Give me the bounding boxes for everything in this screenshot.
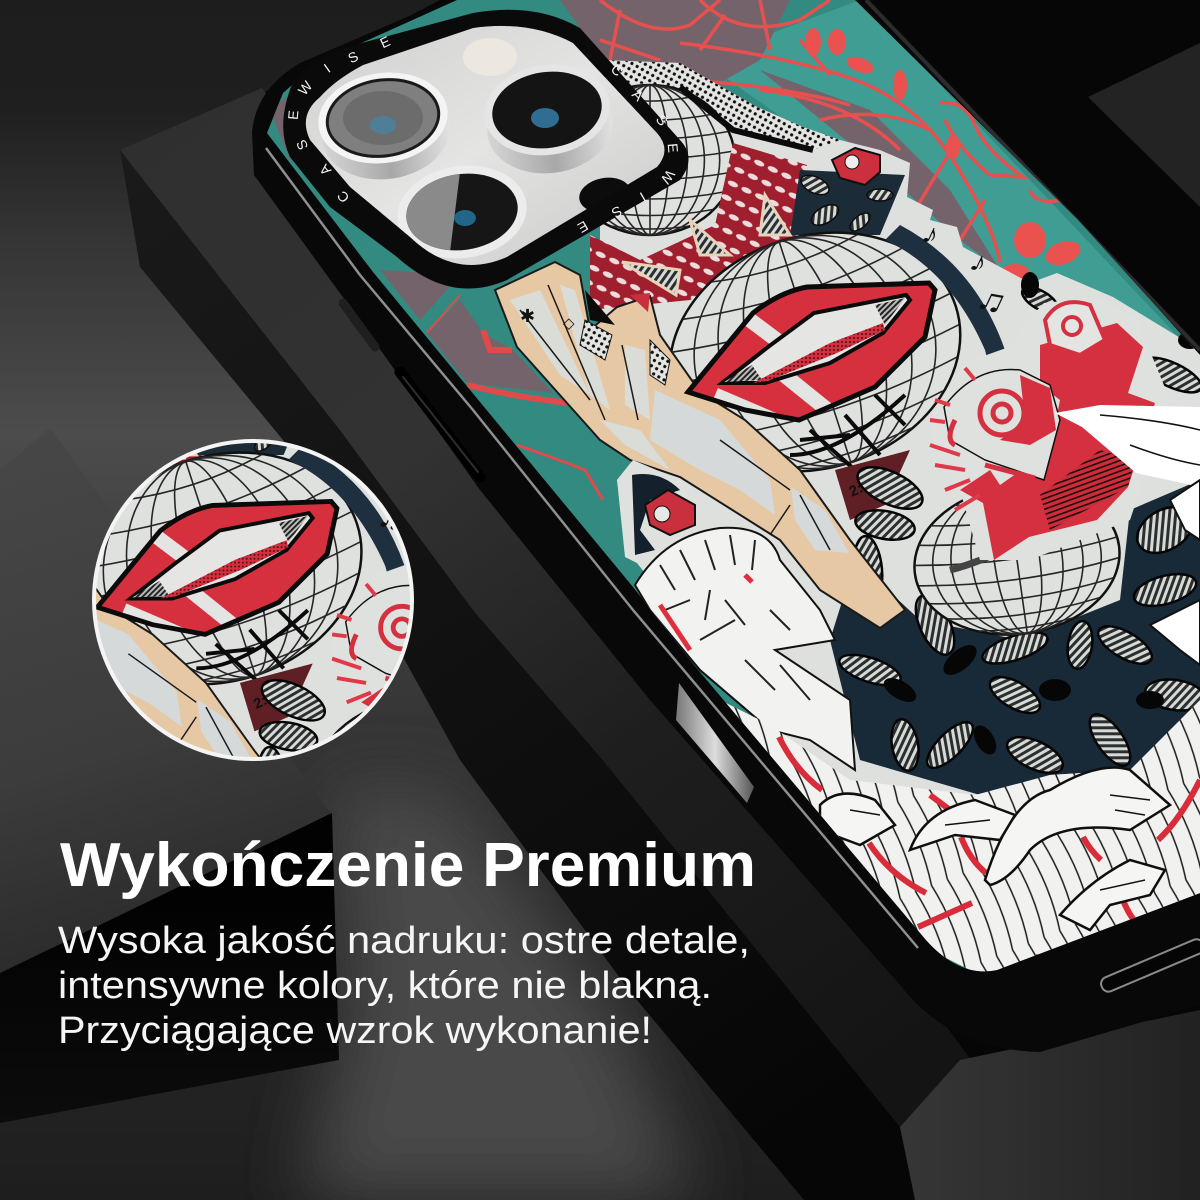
lens 2: [478, 57, 619, 181]
camera island: [283, 10, 688, 289]
CASEWISE left: C: [334, 188, 352, 206]
lens 1 ring: [312, 64, 454, 172]
CASEWISE left: [285, 33, 393, 206]
bloom red petals: [1000, 375, 1056, 445]
main bloom: [944, 369, 1060, 480]
background: upper right block: [1088, 43, 1200, 207]
big ball right outline: [885, 225, 1005, 390]
arm highlight: [650, 390, 775, 515]
top rose: [832, 148, 880, 185]
CASEWISE right: I: [637, 189, 649, 205]
charging port: [1099, 937, 1200, 994]
lens 2 blue: [531, 108, 559, 128]
red stripes: [779, 737, 1200, 962]
music notes: ♫: [972, 275, 1013, 324]
background: floor soft light band: [300, 780, 700, 1200]
maroon band: [835, 450, 910, 520]
artwork on phone back: [250, 0, 1200, 1000]
upper disco ball: [586, 84, 734, 236]
left wave crests: [635, 528, 855, 770]
CASEWISE left: E: [377, 33, 393, 51]
lens 1 inner: [343, 91, 423, 145]
body text: Wysoka jakość nadruku: ostre detale,: [58, 920, 750, 962]
magnifier border: [94, 441, 412, 759]
phone: [250, 0, 1200, 1052]
phone case body: [252, 0, 1200, 1052]
lens 3: [390, 157, 533, 267]
band number: 2:: [847, 480, 866, 501]
halftone paper strip: [600, 60, 1200, 920]
lens 1 glass: [322, 73, 444, 163]
small buttons: [343, 303, 480, 477]
art red leaves: [805, 28, 1084, 280]
CASEWISE left: E: [285, 110, 301, 120]
camera ring: [283, 10, 688, 289]
art lighter teal upper: [727, 2, 1177, 336]
white wave hands: [820, 768, 1170, 930]
leaves: [836, 282, 1200, 780]
white shapes right: [1150, 480, 1200, 665]
lens 2 ring: [478, 57, 616, 163]
lens 1 barrel: [316, 79, 456, 187]
body text: [58, 920, 750, 1052]
CASEWISE right: A: [629, 86, 647, 104]
background: lower left block top: [0, 428, 332, 973]
CASEWISE left: A: [315, 161, 334, 179]
maroon leaf patch: [590, 143, 807, 310]
CASEWISE right: E: [575, 218, 591, 236]
lens 1: [312, 64, 456, 187]
big disco ball: [638, 196, 992, 508]
bloom rim strokes: [930, 368, 980, 510]
ball ears: [622, 195, 790, 295]
big rose: [929, 297, 1170, 560]
lens 2 barrel: [481, 73, 619, 181]
hand finger lines: [850, 795, 1150, 890]
upper ball outline: [680, 87, 813, 150]
rose dark hatch: [1040, 450, 1135, 530]
bloom swirl: [950, 391, 1035, 478]
CASEWISE left: S: [345, 48, 361, 66]
crest red: [660, 575, 752, 650]
lens 3 ring: [391, 157, 533, 267]
CASEWISE right: S: [609, 203, 625, 221]
CASEWISE right: [575, 61, 681, 236]
wrist highlight: [791, 487, 849, 553]
crest lines: [660, 535, 810, 700]
leaf cluster: [798, 171, 893, 234]
CASEWISE right: S: [653, 111, 671, 129]
white feather hand: [1055, 405, 1200, 487]
tongue: [753, 323, 885, 383]
title: Wykończenie Premium: [60, 831, 756, 900]
art lower left red marks: [426, 294, 604, 501]
case silver edge highlight: [266, 148, 918, 948]
background: bottom right floor: [900, 1010, 1200, 1200]
lens 3 glass: [401, 167, 523, 257]
art background teal: [250, 0, 1200, 1000]
lips: [688, 283, 935, 425]
mouth interior: [722, 295, 910, 383]
big ball heavy bottom grid: [790, 395, 905, 470]
finger highlights: [510, 285, 670, 470]
CASEWISE right: C: [608, 61, 626, 79]
CASEWISE left: W: [295, 77, 316, 98]
background: lower left block front: [0, 813, 339, 1123]
lip stripes: [715, 305, 840, 425]
magnified art: [0, 227, 604, 1197]
rose red mass: [960, 323, 1155, 560]
lens 3 blue: [454, 210, 476, 226]
flash: [463, 38, 517, 76]
background: right black area: [250, 0, 1200, 1200]
lens 2 glass: [487, 65, 607, 155]
bottom waves: [720, 700, 1200, 985]
body text: Przyciągające wzrok wykonanie!: [58, 1010, 652, 1052]
music notes: ♪: [917, 216, 945, 253]
music notes: [917, 216, 1013, 324]
lip outline: [688, 283, 935, 420]
camera glass: [306, 26, 664, 265]
art mauve patches: [270, 0, 1000, 393]
hand detail lines: [520, 285, 830, 550]
navy leaf field: [830, 480, 1200, 795]
tattoo diamond: ◇: [563, 315, 575, 332]
lens 1 blue: [370, 116, 396, 134]
art red network: [600, 0, 1060, 262]
tattoo star: ✱: [520, 306, 535, 326]
hatch corners: [724, 298, 905, 382]
background: main platform side: [120, 150, 930, 1200]
hand and arm: [495, 262, 905, 628]
CASEWISE right: W: [657, 167, 678, 188]
upper bloom: [1045, 302, 1105, 355]
hand dots: [580, 320, 612, 360]
small side rose: [617, 460, 700, 563]
lower disco ball: [905, 472, 1129, 648]
rose paper underlay: [929, 297, 1170, 560]
top right case edge: [866, 0, 1200, 350]
black leaf blobs: [880, 272, 1200, 758]
lens 3 reflection: [390, 165, 460, 252]
red fingertip: [630, 293, 650, 312]
CASEWISE right: E: [665, 143, 681, 153]
background: main platform top: [120, 88, 1000, 1127]
halftone dots: [600, 60, 840, 150]
wrist dots: [650, 340, 670, 385]
microphone hole: [576, 174, 634, 216]
side button: [676, 683, 754, 803]
black band behind fingers: [585, 290, 615, 325]
CASEWISE left: I: [321, 60, 333, 76]
CASEWISE left: S: [293, 137, 311, 153]
music notes: ♪: [965, 244, 993, 281]
top small rose leaves: [790, 148, 905, 235]
body text: intensywne kolory, które nie blakną.: [58, 965, 712, 1007]
magnifier circle: [0, 227, 604, 1197]
